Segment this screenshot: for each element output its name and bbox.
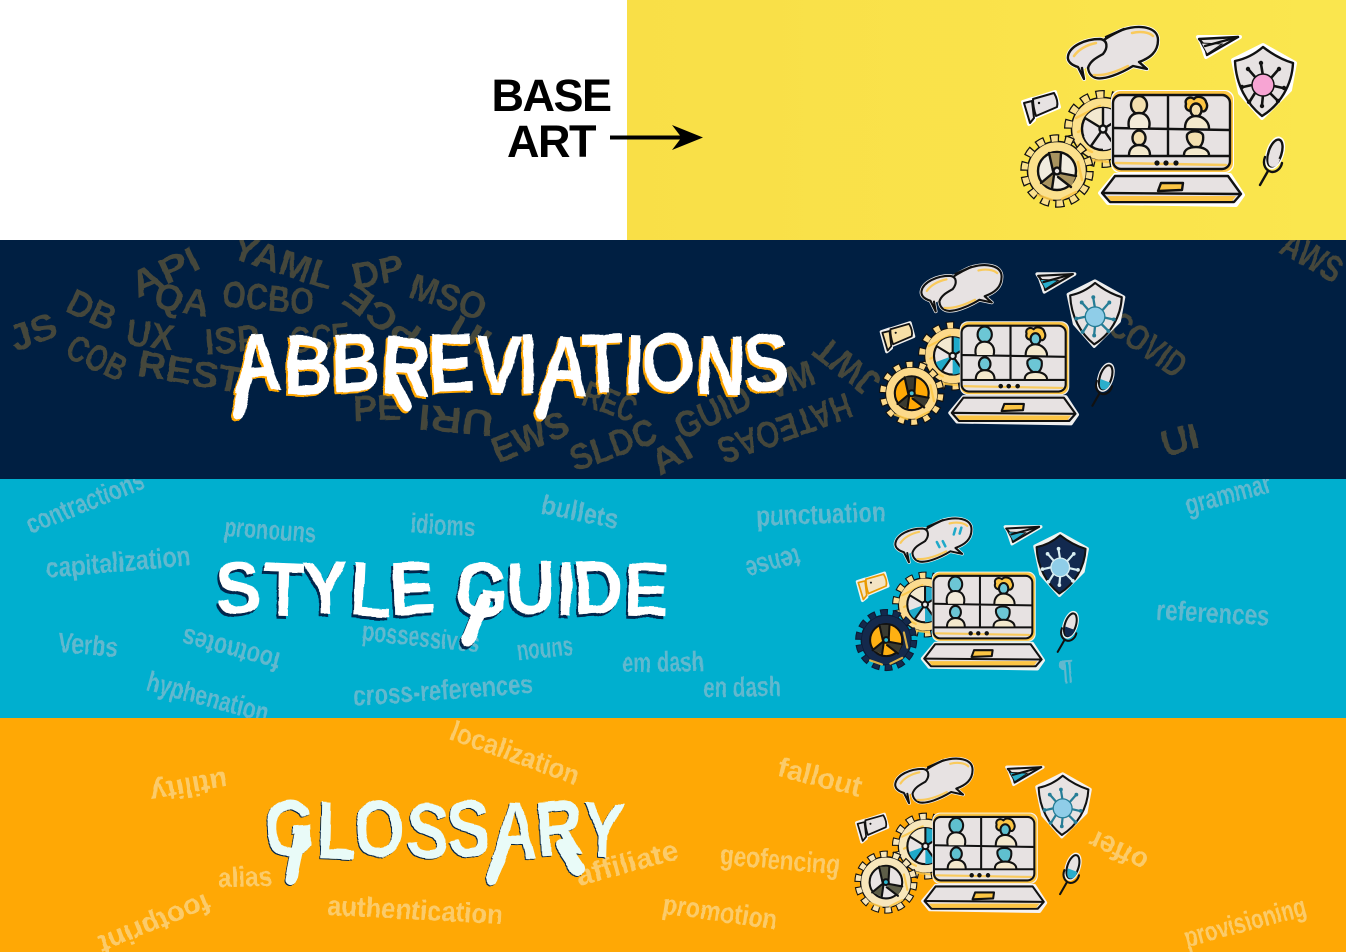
background words: style guide: footnotes <box>179 622 283 678</box>
background words: abbreviations: COVID <box>1101 304 1195 386</box>
panel: abbreviations <box>0 223 1346 483</box>
illustration: base art <box>1023 27 1295 205</box>
panel: style guide <box>0 464 1346 728</box>
icon: laptop keyboard <box>950 397 1077 424</box>
background words: style guide: hyphenation <box>144 666 272 728</box>
background words: abbreviations: ISP <box>203 317 261 363</box>
title: glossary: GLOSSARY <box>262 782 626 876</box>
background words: abbreviations: DB <box>61 281 123 339</box>
navy background <box>0 240 1346 479</box>
background words: glossary: utility <box>147 765 230 809</box>
background words: abbreviations: QA <box>151 275 213 325</box>
icon: laptop screen with video call <box>960 321 1069 395</box>
icon: laptop screen with video call <box>1111 90 1234 173</box>
panel: glossary <box>0 715 1346 952</box>
background words: style guide: grammar <box>1181 468 1275 520</box>
icon: speech bubbles <box>1068 27 1158 79</box>
icon: laptop keyboard <box>1100 175 1243 205</box>
background words: abbreviations: MSO <box>405 265 491 329</box>
icon: speech bubbles <box>921 265 1002 311</box>
background words: glossary <box>94 715 1309 952</box>
background words: style guide: pronouns <box>223 511 317 549</box>
background words: abbreviations: JS <box>3 305 63 359</box>
icon: back gear <box>892 812 936 880</box>
icon: virus shield <box>1068 281 1124 346</box>
background words: abbreviations: REST <box>135 343 246 401</box>
icon: front gear <box>1024 138 1090 204</box>
icon: front gear <box>859 613 914 668</box>
yellow background <box>627 0 1346 240</box>
icon: front gear <box>858 854 914 910</box>
white background panel <box>0 0 627 240</box>
icon: camera <box>881 323 914 351</box>
background words: glossary: promotion <box>661 889 779 935</box>
background words: glossary: alias <box>217 861 273 893</box>
arrow <box>610 125 703 150</box>
panel: base art <box>491 0 1346 240</box>
background words: style guide: ¶ <box>1057 654 1075 686</box>
background words: style guide: em dash <box>622 646 704 678</box>
icon: camera <box>857 573 888 600</box>
background words: style guide: nouns <box>516 630 574 666</box>
icon: microphone <box>1058 611 1080 652</box>
illustration: glossary <box>857 759 1090 911</box>
background words: style guide <box>27 479 1270 718</box>
background words: abbreviations <box>13 240 1343 476</box>
background words: abbreviations: EWS <box>485 403 575 471</box>
background words: abbreviations: JWT <box>806 327 888 404</box>
background words: abbreviations: HATEOAS <box>712 385 858 471</box>
background words: abbreviations: AI <box>643 427 699 483</box>
background words: glossary: affiliate <box>572 834 682 892</box>
icon: front gear <box>883 364 941 422</box>
background words: style guide: references <box>1156 595 1270 631</box>
background words: style guide: punctuation <box>755 496 887 532</box>
icon: back gear <box>892 572 935 638</box>
icon: laptop keyboard <box>923 886 1045 911</box>
icon: laptop keyboard <box>922 643 1043 669</box>
background words: glossary: authentication <box>326 890 504 930</box>
illustration: style guide <box>857 518 1087 669</box>
background words: abbreviations: COB <box>60 326 134 390</box>
background words: abbreviations: GUID <box>668 377 758 447</box>
icon: virus shield <box>1035 534 1087 595</box>
background words: glossary: geofencing <box>719 839 841 881</box>
icon: microphone <box>1260 137 1286 185</box>
background words: glossary: fallout <box>775 752 865 802</box>
icon: microphone <box>1060 853 1083 894</box>
title: style guide: STYLE GUIDE <box>213 545 671 635</box>
icon: speech bubbles <box>895 518 972 562</box>
background words: abbreviations: GCE <box>288 315 352 361</box>
background words: style guide: idioms <box>409 507 477 543</box>
background words: style guide: bullets <box>539 489 621 535</box>
icon: paper plane <box>1198 37 1240 57</box>
teal background <box>0 479 1346 718</box>
background words: abbreviations: PCE <box>335 275 429 357</box>
background words: abbreviations: OCBO <box>220 274 316 322</box>
title: abbreviations: ABBREVIATIONS <box>230 314 791 414</box>
background words: style guide: en dash <box>703 671 781 703</box>
heading: base art: BASE <box>491 70 611 121</box>
icon: laptop screen with video call <box>932 572 1036 642</box>
background words: abbreviations: UX <box>123 311 177 359</box>
background words: abbreviations: UI <box>1156 415 1204 465</box>
icon: virus shield <box>1233 45 1295 118</box>
icon: speech bubbles <box>895 759 973 803</box>
background words: abbreviations: UI <box>442 307 498 363</box>
icon: camera <box>857 814 888 842</box>
background words: abbreviations: API <box>124 238 206 306</box>
heading: base art: ART <box>507 116 596 167</box>
background words: abbreviations: PE <box>352 387 402 429</box>
icon: paper plane <box>1037 274 1075 292</box>
background words: style guide: contractions <box>21 464 149 540</box>
background words: abbreviations: REC <box>577 373 643 431</box>
background words: abbreviations: VM <box>759 352 821 408</box>
background words: style guide: possessives <box>361 615 481 659</box>
icon: microphone <box>1092 363 1116 406</box>
icon: back gear <box>918 321 963 391</box>
background words: style guide: cross-references <box>352 668 534 712</box>
background words: glossary: offer <box>1083 824 1153 878</box>
icon: paper plane <box>1005 527 1041 544</box>
background words: abbreviations: DP <box>348 247 408 297</box>
background words: abbreviations: URI <box>417 396 495 444</box>
icon: paper plane <box>1007 767 1043 784</box>
illustration: abbreviations <box>881 265 1124 424</box>
background words: abbreviations: YAML <box>227 226 339 298</box>
icon: laptop screen with video call <box>932 813 1038 884</box>
orange background <box>0 718 1346 952</box>
background words: style guide: tense <box>742 542 804 586</box>
icon: virus shield <box>1037 774 1090 837</box>
background words: abbreviations: SLDC <box>564 410 662 480</box>
background words: style guide: Verbs <box>57 627 119 663</box>
background words: glossary: localization <box>446 715 584 791</box>
background words: style guide: capitalization <box>44 540 192 584</box>
icon: back gear <box>1068 94 1138 164</box>
icon: camera <box>1023 92 1059 124</box>
